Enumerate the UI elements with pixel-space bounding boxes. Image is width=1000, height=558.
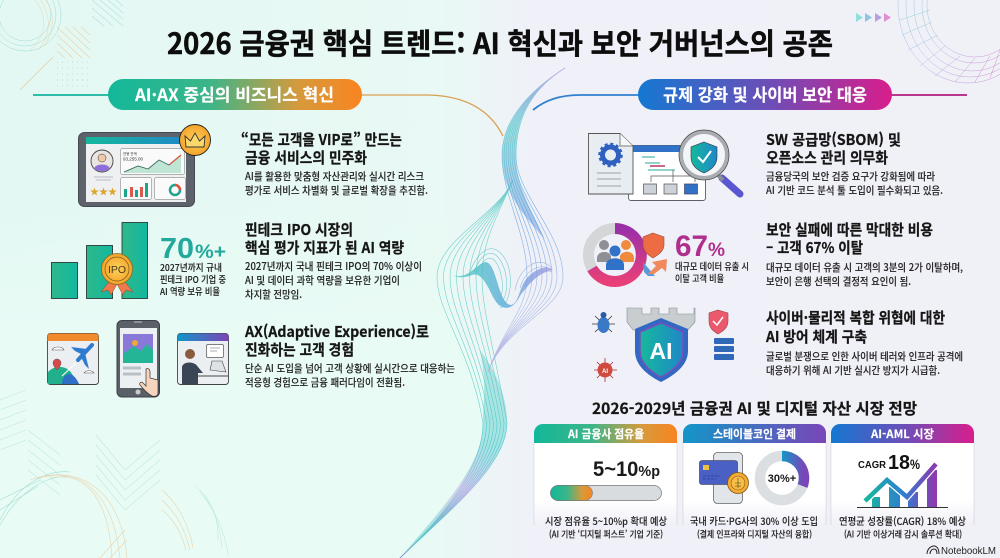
text block: AX adaptive experience: 적응형 경험으로 금융 패러다임이 전환됨. <box>245 375 405 390</box>
panel: AI share card: (AI 기반 ‘디지털 퍼스트’ 기업 기준) <box>549 528 663 540</box>
section badge left: AI·AX 중심의 비즈니스 혁신 <box>134 81 334 106</box>
text block: AX adaptive experience: 진화하는 고객 경험 <box>245 339 354 360</box>
icon: consultant window <box>178 334 228 384</box>
decorative central wave ribbons <box>400 68 640 558</box>
text block: cyber-physical threats: AI 방어 체계 구축 <box>765 326 867 347</box>
icon: bug <box>592 312 615 333</box>
panel: stablecoin payment card: (결제 인프라와 디지털 자산의 융합) <box>697 528 812 540</box>
text block: cyber-physical threats <box>765 307 963 378</box>
text block: VIP democratization <box>241 129 428 198</box>
icon: IPO bar chart with medal: IPO <box>108 264 126 276</box>
icon: tablet dashboard with crown <box>78 124 210 206</box>
chart: churn donut with people <box>588 228 667 282</box>
panel: AI share card: AI 금융사 점유율 <box>567 426 644 442</box>
chart: growth bars and arrow: CAGR <box>858 459 886 471</box>
text block: AX adaptive experience <box>244 321 455 390</box>
text block: security failure cost <box>766 219 963 289</box>
stat: 70%+ <box>160 233 226 298</box>
text block: fintech IPO <box>245 219 422 302</box>
icon: crown badge <box>180 124 210 156</box>
stat: 67%: 이탈 고객 비율 <box>675 271 724 285</box>
panel: AI share card: 시장 점유율 5~10%p 확대 예상 <box>545 513 667 528</box>
text block: VIP democratization: AI를 활용한 맞춤형 자산관리와 실시간 리스크 <box>245 169 424 184</box>
decorative arrows <box>856 13 891 22</box>
chart: 30% donut: 30%+ <box>768 473 796 485</box>
text block: SBOM: 오픈소스 관리 의무화 <box>766 147 888 168</box>
panel: stablecoin payment card: 스테이블코인 결제 <box>713 426 796 442</box>
text block: SBOM: 금융당국의 보안 검증 요구가 강화됨에 따라 <box>766 169 935 184</box>
panel: stablecoin payment card <box>683 424 826 540</box>
stat: 70%+: 핀테크 IPO 기업 중 <box>160 272 226 286</box>
text block: SBOM: AI 기반 코드 분석 툴 도입이 필수화되고 있음. <box>766 183 943 198</box>
heading: market outlook: 2026-2029년 금융권 AI 및 디지털 자산 시장 전망 <box>592 397 917 419</box>
text block: security failure cost: 보안이 은행 선택의 결정적 요인이 됨. <box>766 274 911 289</box>
text block: cyber-physical threats: 글로벌 분쟁으로 인한 사이버 테러와 인프라 공격에 <box>766 349 963 364</box>
icon: virus web <box>594 358 617 382</box>
panel: AI share card: 5~10%p <box>593 458 660 481</box>
section badge left <box>33 79 503 136</box>
icon: bidirectional arrows <box>643 259 667 276</box>
icon: IPO bar chart with medal <box>52 222 148 298</box>
panel: AI-AML card: 연평균 성장률(CAGR) 18% 예상 <box>839 513 966 528</box>
chart: growth bars and arrow: 18 <box>888 452 910 474</box>
text block: VIP democratization: 금융 서비스의 민주화 <box>245 147 367 168</box>
text block: fintech IPO: 2027년까지 국내 핀테크 IPO의 70% 이상이 <box>245 259 422 274</box>
right column: regulation and cyber security <box>534 79 974 540</box>
text block: security failure cost: 대규모 데이터 유출 시 고객의 3분의 2가 이탈하며, <box>766 260 963 275</box>
text block: SBOM <box>766 129 943 198</box>
chart: growth bars and arrow <box>857 452 948 508</box>
icon: AI shield and castle <box>592 308 734 382</box>
icon: document, folders and magnifier <box>588 130 740 200</box>
chart: 30% donut <box>760 456 804 500</box>
stat: 67%: 67 <box>675 230 708 263</box>
stat: 67%: % <box>708 240 725 261</box>
icon: small check shield <box>709 310 728 334</box>
icon: AI shield and castle: AI <box>650 338 672 364</box>
text block: fintech IPO: 핵심 평가 지표가 된 AI 역량 <box>245 237 404 258</box>
stat: 67%: 대규모 데이터 유출 시 <box>675 259 749 273</box>
panel: AI-AML card <box>831 424 974 540</box>
text block: SBOM: SW 공급망(SBOM) 및 <box>766 129 901 150</box>
panel: AI-AML card: (AI 기반 이상거래 감시 솔루션 확대) <box>844 528 962 540</box>
icon: server stack <box>714 338 734 360</box>
decorative bottom-left waves <box>0 390 228 558</box>
icon: tablet dashboard with crown: ★★★ <box>90 187 117 197</box>
icon: tablet dashboard with crown: 연봉 잔액 <box>123 151 137 157</box>
stat: 67% <box>675 230 749 285</box>
left column: AI·AX business innovation <box>33 79 503 397</box>
icon: warning shield <box>643 233 664 258</box>
chart: growth bars and arrow: % <box>910 456 920 472</box>
text block: fintech IPO: 핀테크 IPO 시장의 <box>245 219 353 240</box>
icon: phone, card and coin <box>700 452 748 504</box>
text block: cyber-physical threats: 대응하기 위해 AI 기반 실시간 방지가 시급함. <box>766 363 940 378</box>
decorative top-right ring <box>898 0 1000 83</box>
progress bar <box>550 486 662 500</box>
stat: 70%+: AI 역량 보유 비율 <box>160 284 220 298</box>
decorative top-left pattern <box>0 0 123 90</box>
icon: smartphone with touch <box>117 320 160 397</box>
stat: 70%+: 70 <box>160 233 194 265</box>
icon: tablet dashboard with crown: 93,255.00 <box>123 156 144 162</box>
text block: fintech IPO: AI 및 데이터 과학 역량을 보유한 기업이 <box>245 273 400 288</box>
text block: VIP democratization: “모든 고객을 VIP로” 만드는 <box>241 129 402 150</box>
text block: AX adaptive experience: AX(Adaptive Experience)로 <box>244 321 429 342</box>
panel: stablecoin payment card: 국내 카드·PG사의 30% 이상 도입 <box>690 513 818 528</box>
text block: AX adaptive experience: 단순 AI 도입을 넘어 고객 상황에 실시간으로 대응하는 <box>245 361 455 376</box>
panel: AI share card <box>534 424 677 540</box>
text block: VIP democratization: 평가로 서비스 차별화 및 글로벌 확장을 추진함. <box>245 183 428 198</box>
icon: virus web: AI <box>602 369 608 375</box>
title: 2026 금융권 핵심 트렌드: AI 혁신과 보안 거버넌스의 공존 <box>167 21 833 63</box>
text block: fintech IPO: 차지할 전망임. <box>245 287 302 302</box>
text block: cyber-physical threats: 사이버·물리적 복합 위협에 대한 <box>766 307 945 328</box>
panel: AI-AML card: AI-AML 시장 <box>870 426 934 442</box>
text block: security failure cost: – 고객 67% 이탈 <box>766 237 863 258</box>
NotebookLM mark: NotebookLM <box>941 545 996 557</box>
text block: security failure cost: 보안 실패에 따른 막대한 비용 <box>766 219 933 240</box>
icon: travel app window <box>48 334 99 384</box>
section badge right: 규제 강화 및 사이버 보안 대응 <box>663 81 867 106</box>
stat: 70%+: 2027년까지 규내 <box>160 260 222 274</box>
section badge right <box>638 79 967 110</box>
stat: 70%+: %+ <box>195 242 226 263</box>
